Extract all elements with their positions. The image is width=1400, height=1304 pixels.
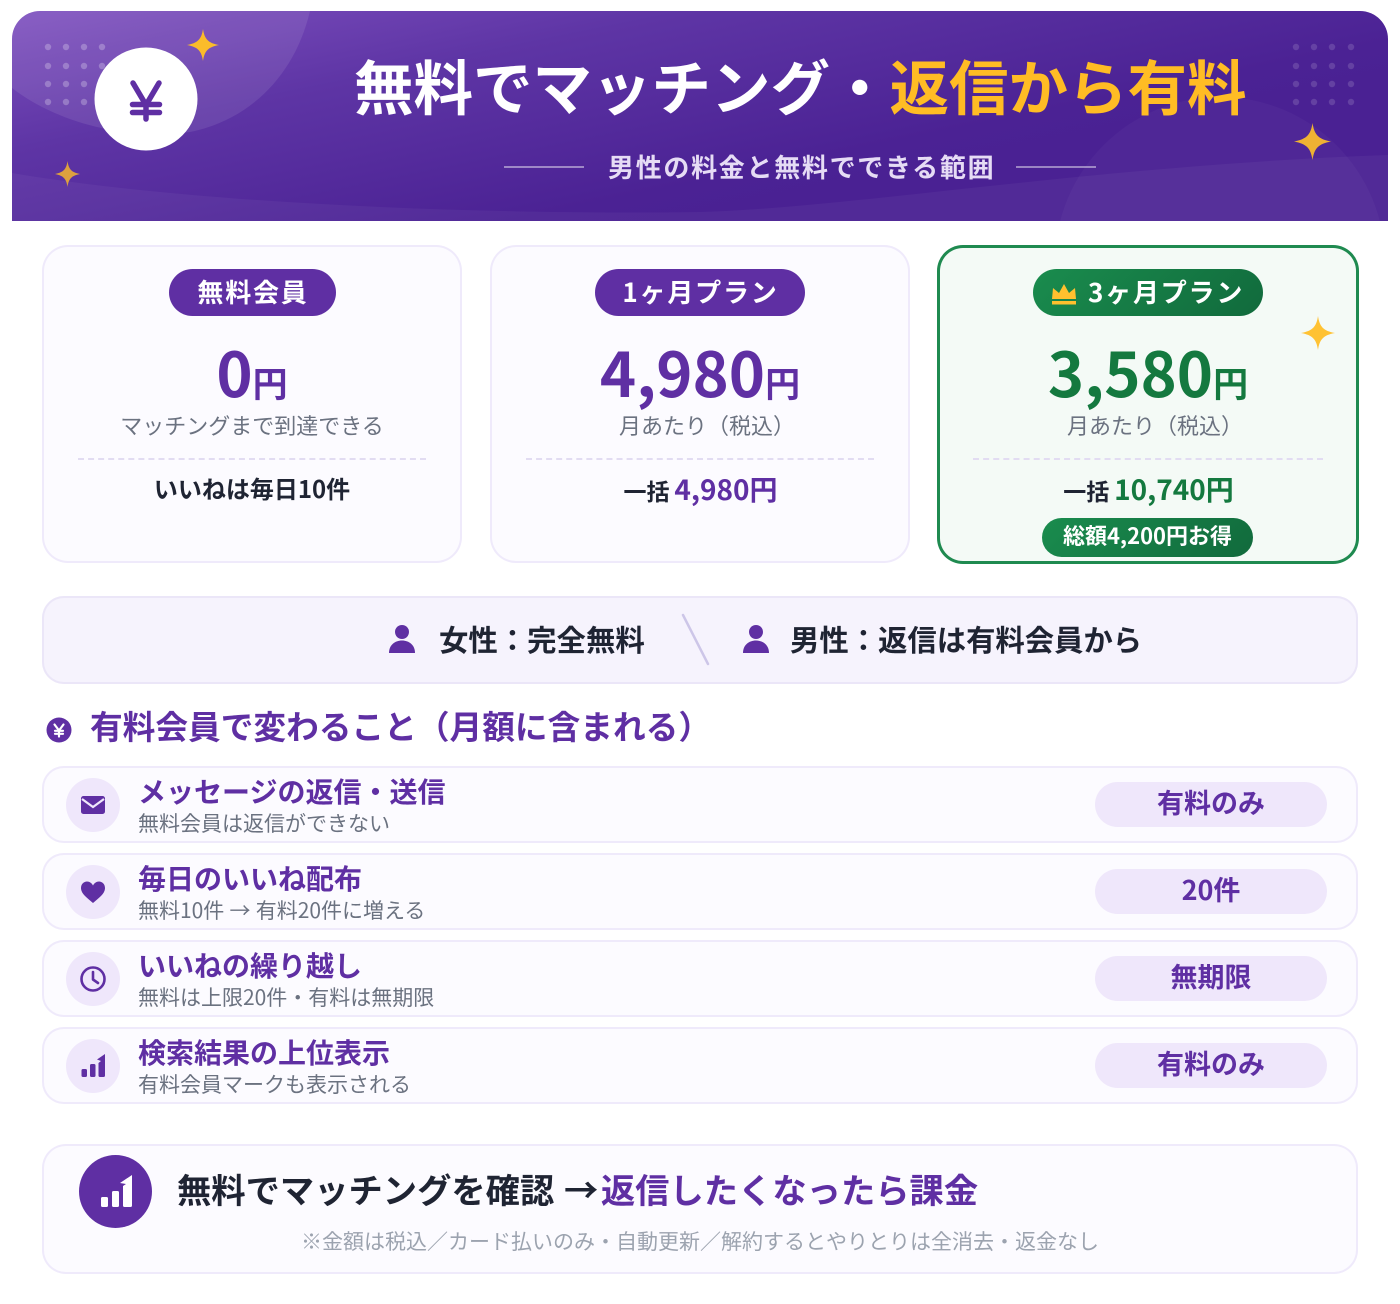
price note: 月あたり（税込） <box>1067 409 1243 441</box>
panel: gender pricing band <box>42 596 1358 684</box>
feature note: 無料10件 → 有料20件に増える <box>138 895 425 925</box>
feature note: 無料会員は返信ができない <box>138 808 390 838</box>
price: 3,580円 <box>1048 326 1248 415</box>
header banner <box>12 11 1388 221</box>
status badge <box>1095 782 1327 827</box>
price note: マッチングまで到達できる <box>120 409 384 441</box>
status badge <box>1095 1043 1327 1088</box>
status badge: 有料のみ <box>1157 782 1265 821</box>
icon: yen badge <box>46 718 72 742</box>
slash divider <box>682 614 710 666</box>
lump sum price: 一括 4,980円 <box>623 469 778 509</box>
plan badge: 1ヶ月プラン <box>622 273 779 310</box>
icon: rising bars <box>66 1039 120 1093</box>
savings badge <box>1042 518 1253 557</box>
subtitle text: 男性の料金と無料でできる範囲 <box>608 148 995 185</box>
plan badge <box>1033 269 1263 316</box>
feature row: search ranking <box>42 1027 1358 1104</box>
subtitle rule left <box>504 166 584 168</box>
badge text: 3ヶ月プラン <box>1088 273 1244 310</box>
icon: sparkle top <box>187 29 219 61</box>
status badge: 無期限 <box>1170 956 1252 995</box>
price: 4,980円 <box>600 326 800 415</box>
feature title: いいねの繰り越し <box>138 945 362 985</box>
savings badge: 総額4,200円お得 <box>1063 519 1232 551</box>
plan detail: いいねは毎日10件 <box>154 470 350 505</box>
icon: sparkle bottom left <box>55 161 80 187</box>
feature row: likes rollover <box>42 940 1358 1017</box>
status badge: 20件 <box>1182 869 1240 908</box>
status badge <box>1095 956 1327 1001</box>
plan badge <box>595 269 805 316</box>
section heading <box>46 702 711 749</box>
icon: clock <box>66 952 120 1006</box>
status badge: 有料のみ <box>1157 1043 1265 1082</box>
conclusion headline: 無料でマッチングを確認 →返信したくなったら課金 <box>177 1163 978 1213</box>
title: 無料でマッチング・返信から有料 <box>354 42 1246 128</box>
feature title: 毎日のいいね配布 <box>138 858 362 898</box>
lump sum price: 一括 10,740円 <box>1063 469 1234 509</box>
status badge <box>1095 869 1327 914</box>
plan badge: 無料会員 <box>197 273 309 310</box>
male pricing: 男性：返信は有料会員から <box>790 618 1142 660</box>
subtitle rule right <box>1016 166 1096 168</box>
icon: envelope <box>66 778 120 832</box>
price note: 月あたり（税込） <box>619 409 795 441</box>
feature note: 有料会員マークも表示される <box>138 1069 411 1099</box>
icon: sparkle <box>1301 316 1335 350</box>
heading text: 有料会員で変わること（月額に含まれる） <box>90 702 711 749</box>
panel: conclusion <box>42 1144 1358 1274</box>
feature row: message reply <box>42 766 1358 843</box>
feature row: daily likes <box>42 853 1358 930</box>
plan badge <box>169 269 336 316</box>
icon: crown <box>1052 284 1076 304</box>
panel: one month plan <box>490 245 910 563</box>
footnote: ※金額は税込／カード払いのみ・自動更新／解約するとやりとりは全消去・返金なし <box>301 1226 1099 1256</box>
icon: sparkle right <box>1294 123 1331 160</box>
feature title: メッセージの返信・送信 <box>138 771 445 811</box>
icon: yen coin <box>94 48 198 150</box>
panel: three month plan <box>937 245 1359 564</box>
female pricing: 女性：完全無料 <box>439 618 645 660</box>
feature note: 無料は上限20件・有料は無期限 <box>138 982 434 1012</box>
icon: woman <box>389 625 415 653</box>
icon: growth badge <box>79 1155 152 1228</box>
header background art <box>12 11 1388 221</box>
icon: heart <box>66 865 120 919</box>
icon: man <box>743 625 769 653</box>
feature title: 検索結果の上位表示 <box>138 1032 390 1072</box>
price: 0円 <box>216 326 288 415</box>
panel: free member plan <box>42 245 462 563</box>
